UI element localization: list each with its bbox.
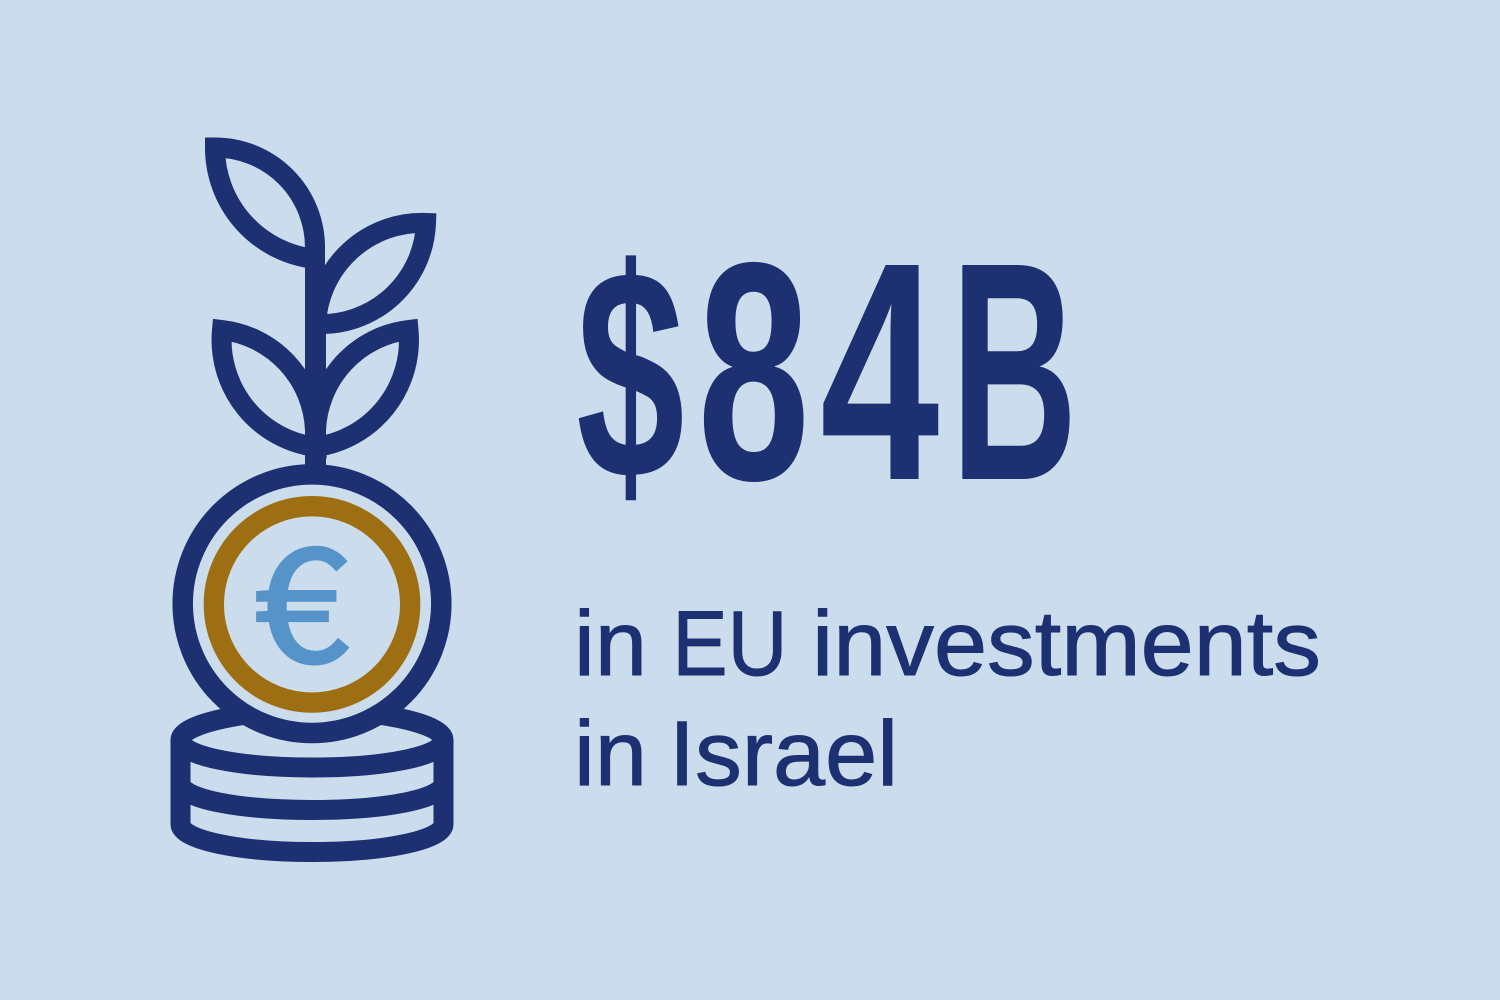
icon: plant growing from euro coin on stacked coins: [180, 148, 444, 852]
headline value: 8: [698, 197, 810, 545]
description line 2: in: [574, 703, 647, 805]
headline value: [576, 197, 1078, 545]
icon: top right leaf: [316, 223, 426, 324]
description line 2: Israel: [669, 703, 898, 805]
description line 1: EU: [672, 593, 787, 695]
description text: [574, 593, 1321, 805]
icon: top left leaf: [215, 148, 315, 259]
headline value: 4: [820, 197, 941, 545]
description line 1: in: [574, 593, 647, 695]
headline value: $: [576, 206, 685, 542]
icon: coin stack: [180, 715, 444, 852]
icon: gold coin ring: [214, 506, 410, 703]
icon: plant stem: [315, 255, 316, 466]
icon: large coin outline: [183, 474, 441, 733]
icon: lower left leaf: [222, 330, 316, 447]
description line 1: investments: [812, 593, 1321, 695]
icon: lower right leaf: [316, 330, 409, 447]
headline value: B: [951, 197, 1078, 545]
icon: euro sign: €: [254, 479, 348, 708]
